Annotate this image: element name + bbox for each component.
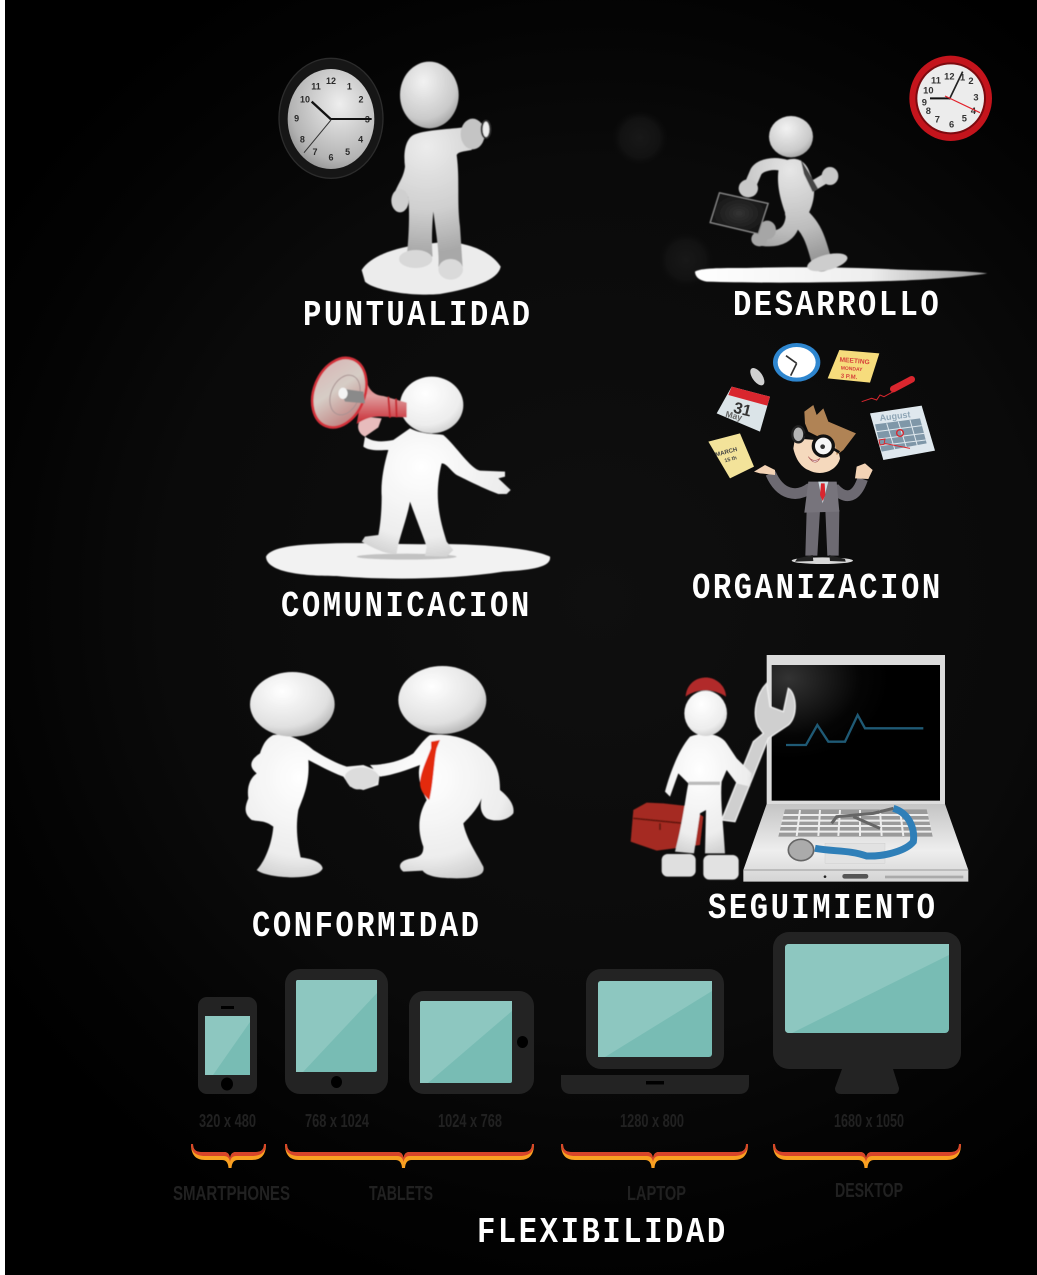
icon: grey wall clock: 7	[312, 147, 317, 157]
resolution labels: 768 x 1024	[305, 1111, 369, 1131]
heading: desarrollo: DESARROLLO	[733, 286, 939, 327]
icon: red wall clock: 11	[931, 75, 941, 85]
heading: conformidad: CONFORMIDAD	[252, 907, 479, 948]
brace: laptop	[561, 1144, 748, 1168]
panel: conformidad	[246, 666, 514, 948]
icon: blue clock	[773, 343, 820, 382]
figure: businessman	[754, 405, 873, 564]
icon: meeting note: MONDAY	[840, 365, 863, 373]
icon: meeting note: MEETING	[839, 357, 870, 366]
resolution labels: 320 x 480	[199, 1111, 256, 1131]
icon: grey wall clock: 5	[345, 147, 350, 157]
icon: red wall clock: 7	[935, 115, 940, 125]
category labels	[173, 1180, 903, 1205]
icon: red wall clock	[909, 56, 992, 141]
icon: calendar 31 May: May	[725, 409, 743, 423]
icon: calendar 31 May: 31	[732, 400, 753, 421]
icon: grey wall clock: 11	[311, 81, 321, 91]
icon: red wall clock: 2	[968, 76, 974, 86]
category labels: DESKTOP	[835, 1180, 903, 1202]
icon: red wall clock: 5	[962, 114, 967, 124]
icon: red wall clock: 3	[973, 93, 979, 103]
panel: comunicacion	[266, 350, 550, 628]
heading: comunicacion: COMUNICACION	[281, 587, 529, 628]
heading: seguimiento: SEGUIMIENTO	[708, 889, 935, 930]
icon: smartphone	[198, 997, 257, 1094]
icon: red wall clock: 8	[926, 106, 931, 116]
icon: grey wall clock: 12	[326, 76, 336, 86]
icon: grey wall clock: 6	[328, 153, 333, 163]
panel: desarrollo	[695, 56, 992, 327]
icon: March note: MARCH	[715, 447, 738, 459]
icon: grey wall clock: 1	[347, 81, 352, 91]
brace: smartphones	[191, 1144, 266, 1168]
figure: running man with briefcase	[695, 116, 987, 283]
illustration: juggling office worker	[708, 343, 935, 564]
icon: red wall clock: 1	[960, 73, 965, 83]
figure: man with megaphone	[266, 350, 550, 579]
illustration: laptop with stethoscope	[743, 655, 968, 882]
figure: man checking watch	[362, 62, 501, 295]
heading: flexibilidad: FLEXIBILIDAD	[477, 1213, 725, 1254]
icon: meeting note: 3 P.M.	[840, 374, 858, 381]
icon: red wall clock: 6	[949, 119, 954, 129]
category labels: SMARTPHONES	[173, 1183, 290, 1205]
brace: tablets	[285, 1144, 534, 1168]
icon: grey wall clock: 2	[358, 95, 363, 105]
icon: landscape tablet	[409, 991, 534, 1094]
icon: paperclip	[748, 366, 767, 388]
icon: August calendar: August	[879, 409, 911, 423]
icon: desktop monitor	[773, 932, 961, 1094]
resolution labels	[199, 1111, 904, 1131]
resolution labels: 1024 x 768	[438, 1111, 502, 1131]
category labels: LAPTOP	[627, 1183, 686, 1205]
heading: organizacion: ORGANIZACION	[692, 569, 940, 610]
resolution labels: 1680 x 1050	[834, 1111, 904, 1131]
icon: March note: 15 th	[724, 455, 738, 464]
heading: puntualidad: PUNTUALIDAD	[303, 296, 530, 337]
brace: desktop	[773, 1144, 961, 1168]
icon: grey wall clock: 8	[300, 134, 305, 144]
panel: seguimiento	[631, 655, 968, 930]
icon: grey wall clock: 9	[294, 114, 299, 124]
panel: organizacion	[692, 343, 940, 610]
icon: March note	[708, 433, 754, 478]
icon: red wall clock: 12	[944, 71, 955, 81]
panel: puntualidad	[279, 58, 530, 337]
figure: two people shaking hands	[246, 666, 514, 878]
icon: meeting note	[828, 350, 879, 383]
icon: grey wall clock: 3	[365, 115, 370, 125]
icon: laptop	[561, 969, 749, 1094]
icon: grey wall clock	[279, 58, 383, 178]
icon: calendar 31 May	[717, 387, 770, 432]
figure: repair worker with wrench and toolbox	[631, 677, 795, 880]
icon: portrait tablet	[285, 969, 388, 1094]
resolution labels: 1280 x 800	[620, 1111, 684, 1131]
icon: August calendar	[870, 406, 935, 460]
icon: red wall clock: 10	[923, 85, 934, 95]
icon: red marker	[862, 379, 912, 402]
category labels: TABLETS	[369, 1183, 433, 1205]
icon: grey wall clock: 4	[358, 134, 363, 144]
icon: red wall clock: 9	[922, 97, 927, 107]
panel: flexibilidad	[173, 932, 961, 1254]
icon: red wall clock: 4	[971, 106, 977, 116]
icon: grey wall clock: 10	[300, 95, 310, 105]
